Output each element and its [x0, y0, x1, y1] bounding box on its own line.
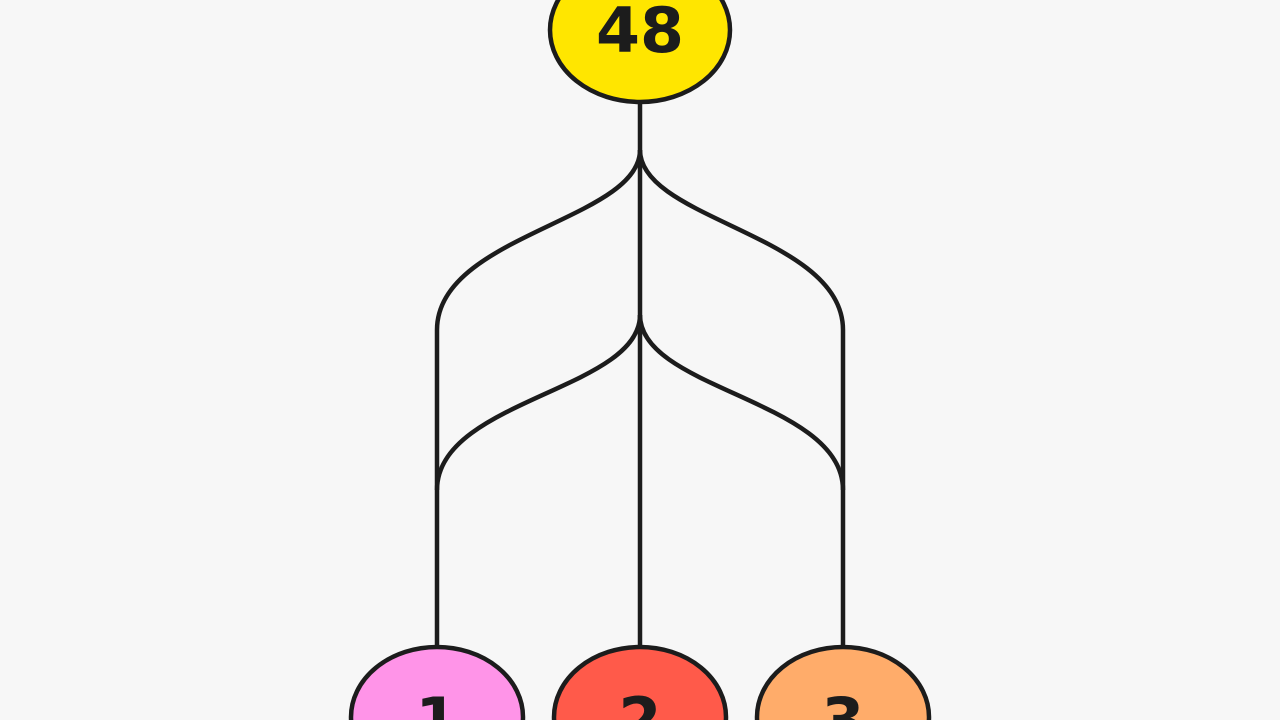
node: 2 [552, 644, 728, 720]
connector lines [437, 100, 843, 648]
node: 3 [754, 644, 932, 720]
node: 1 [348, 644, 526, 720]
top node: 48 [548, 0, 732, 104]
